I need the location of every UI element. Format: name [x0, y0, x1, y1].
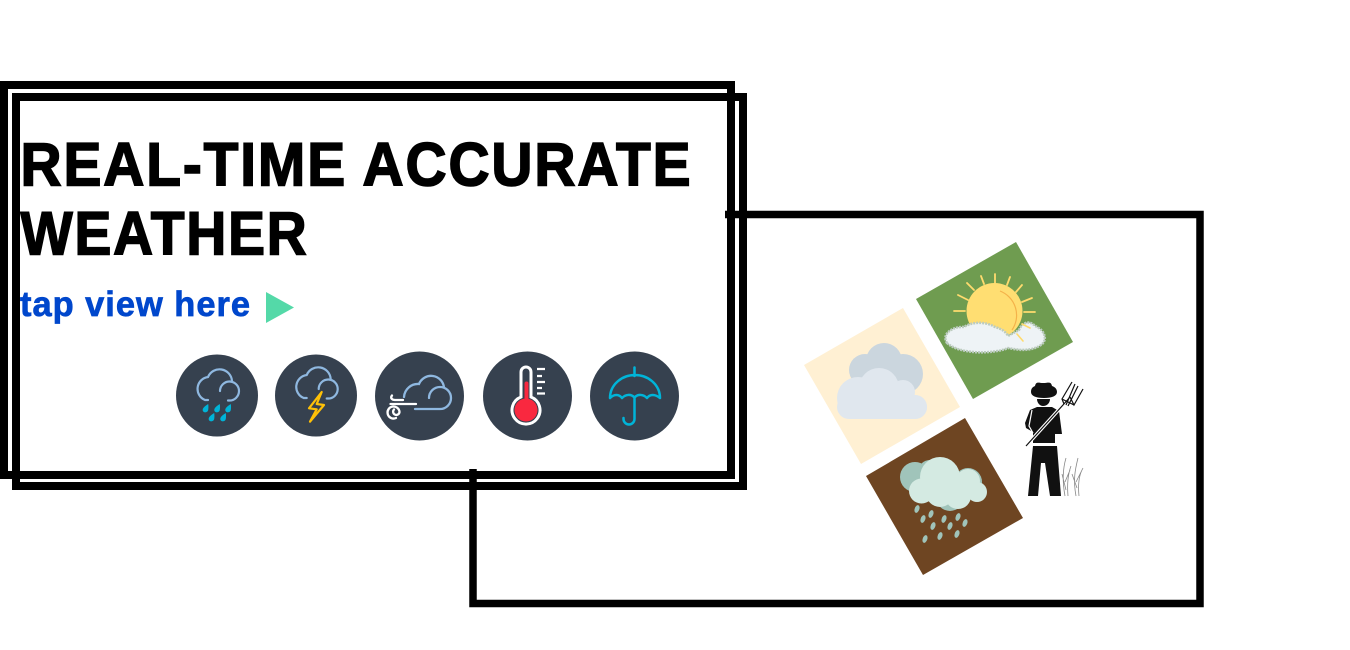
grass: [1062, 458, 1083, 496]
rays over cloud: [1017, 324, 1030, 341]
title: REAL-TIME ACCURATE: [20, 130, 692, 200]
arm highlight: [1029, 410, 1033, 433]
sun: [966, 283, 1022, 339]
icon: rain cloud: [176, 354, 258, 436]
sun rays: [954, 274, 1035, 312]
icon: umbrella: [590, 352, 679, 440]
frame: inner title rectangle: [16, 97, 743, 486]
front cloud: [837, 368, 927, 419]
link: tap view here: tap view here: [20, 285, 251, 324]
title: WEATHER: [20, 200, 308, 268]
pitchfork: [1026, 405, 1063, 446]
title: [20, 130, 692, 268]
icon: lightning cloud: [275, 354, 357, 436]
sun cloud: [945, 323, 1045, 352]
panel: sunny tile: [916, 242, 1073, 399]
icon: thermometer: [483, 352, 572, 440]
icon: farmer with pitchfork: [1025, 382, 1083, 496]
back cloud: [900, 460, 982, 511]
panel: rainy tile: [866, 418, 1023, 575]
icon: windy cloud: [375, 352, 464, 440]
frame: outer title rectangle: [4, 85, 731, 475]
frame: image rectangle: [473, 214, 1200, 604]
raindrops: [913, 504, 969, 544]
back cloud: [849, 343, 923, 395]
front cloud: [909, 457, 987, 509]
farmer figure: [1025, 383, 1062, 496]
arrow: play triangle: [266, 292, 294, 323]
panel: cloudy tile: [804, 308, 960, 464]
